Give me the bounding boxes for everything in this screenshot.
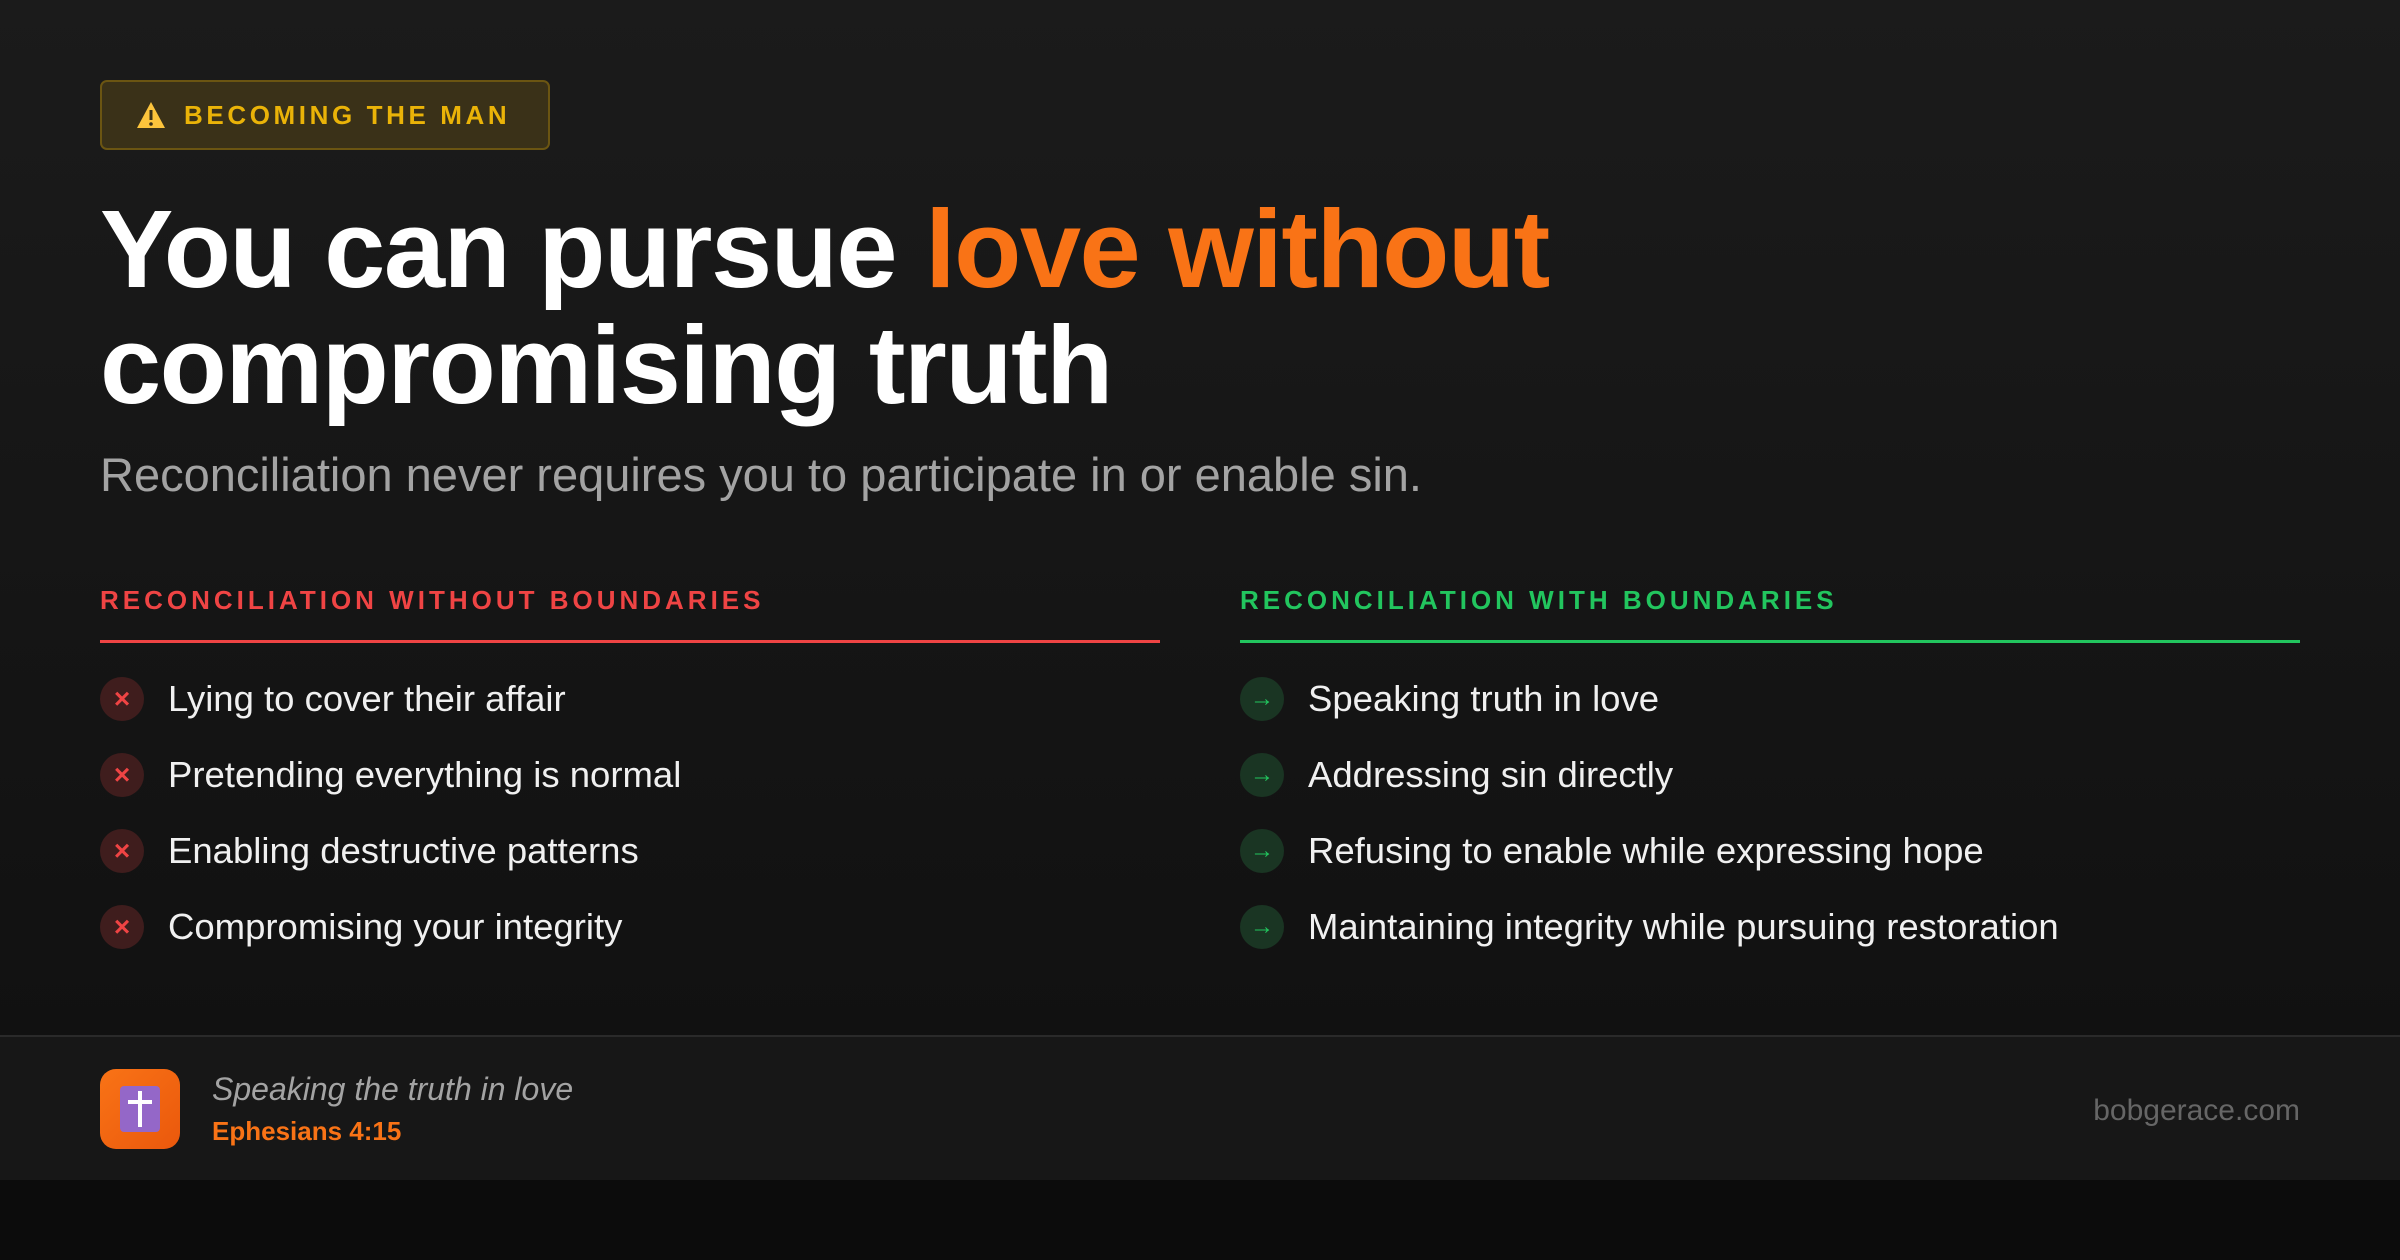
item: Pretending everything is normal [168, 754, 681, 795]
item: Enabling destructive patterns [168, 830, 639, 871]
footer [0, 1035, 2400, 1180]
verse text: Ephesians 4:15 [212, 1116, 401, 1146]
item: → [1250, 685, 1274, 712]
item: × [114, 683, 130, 714]
verse text [212, 1071, 573, 1146]
heading: with boundaries: RECONCILIATION WITH BOUNDARIES [1240, 585, 1838, 615]
item: Maintaining integrity while pursuing restoration [1308, 906, 2059, 947]
item: × [114, 911, 130, 942]
item: → [1250, 761, 1274, 788]
heading: with boundaries [1240, 585, 2300, 643]
title [100, 188, 1549, 427]
item: Refusing to enable while expressing hope [1308, 830, 1984, 871]
panel: without boundaries [100, 585, 1160, 949]
title: You can pursue love without [100, 188, 1549, 311]
item: → [1250, 913, 1274, 940]
subtitle: Reconciliation never requires you to participate in or enable sin. [100, 448, 1422, 501]
badge: BECOMING THE MAN [184, 100, 510, 130]
item: Compromising your integrity [168, 906, 622, 947]
site url: bobgerace.com [2093, 1094, 2300, 1127]
item: × [114, 835, 130, 866]
icon: cross [100, 1069, 180, 1149]
item: Speaking truth in love [1308, 678, 1659, 719]
item: → [1250, 837, 1274, 864]
item: Addressing sin directly [1308, 754, 1673, 795]
verse text: Speaking the truth in love [212, 1071, 573, 1107]
heading: without boundaries: RECONCILIATION WITHOUT BOUNDARIES [100, 585, 764, 615]
badge [100, 80, 550, 150]
item: × [114, 759, 130, 790]
heading: without boundaries [100, 585, 1160, 643]
title: compromising truth [100, 304, 1112, 427]
item: Lying to cover their affair [168, 678, 566, 719]
panel: with boundaries [1240, 585, 2300, 949]
